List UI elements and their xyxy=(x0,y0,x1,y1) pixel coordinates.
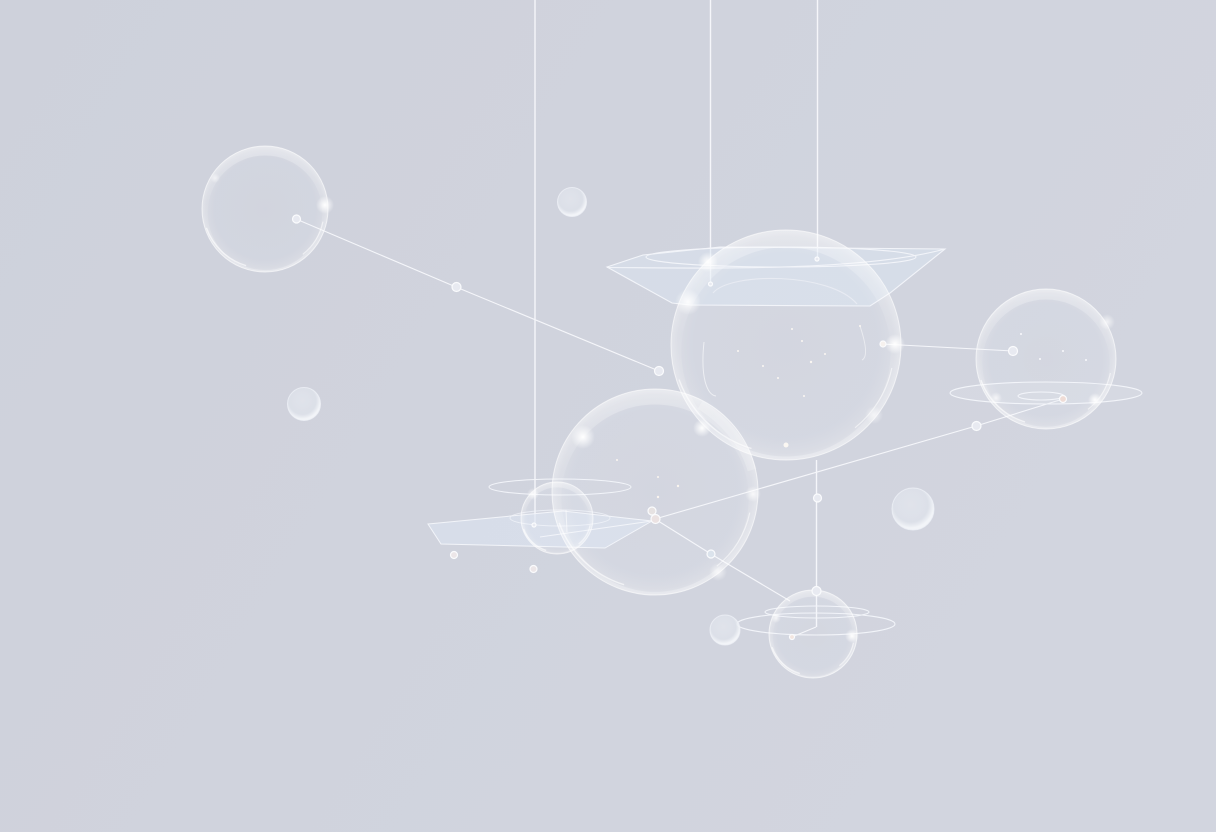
glass rings: right xyxy=(950,382,1142,404)
bubble: large lower xyxy=(552,389,761,595)
hanging threads xyxy=(535,0,818,627)
connector lines xyxy=(296,219,1063,637)
bubble: large center xyxy=(671,230,905,460)
bubble: bottom xyxy=(769,590,859,678)
bubble: small left on plane xyxy=(521,482,593,554)
glass plane: top xyxy=(607,247,945,306)
connector nodes xyxy=(292,215,1066,640)
small floating bubbles xyxy=(288,188,934,645)
glass plane: left xyxy=(428,479,652,548)
bubble: upper left xyxy=(202,146,334,272)
bubble: right xyxy=(976,289,1116,429)
specks in center bubble xyxy=(737,325,861,448)
glass rings: bottom xyxy=(737,606,895,635)
